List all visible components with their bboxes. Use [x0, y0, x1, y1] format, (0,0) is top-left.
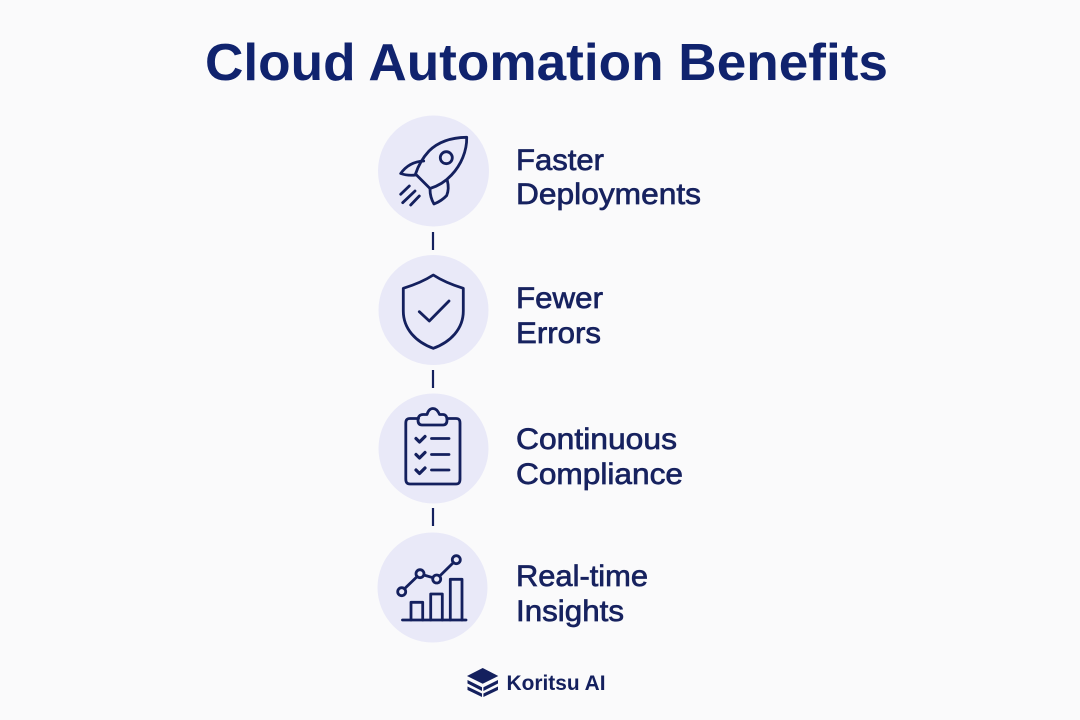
step: fewer errors — [378, 255, 603, 365]
connector: step 2 to 3 — [432, 370, 434, 388]
brand name: Koritsu AI — [506, 672, 606, 695]
label: faster deployments: Faster — [516, 144, 604, 177]
step: real-time insights — [378, 532, 648, 642]
brand logo — [467, 668, 606, 697]
label: real-time insights — [516, 560, 648, 628]
label: faster deployments: Deployments — [516, 178, 701, 211]
icon: layered cube — [467, 668, 498, 697]
icon circle: shield — [378, 255, 488, 365]
connector: step 3 to 4 — [432, 508, 434, 526]
label: real-time insights: Real-time — [516, 560, 648, 593]
connector: step 1 to 2 — [432, 232, 434, 250]
label: faster deployments — [516, 144, 701, 211]
label: real-time insights: Insights — [516, 595, 624, 628]
label: continuous compliance: Continuous — [516, 423, 677, 456]
icon circle: chart — [378, 532, 488, 642]
label: continuous compliance — [516, 423, 683, 491]
icon circle: clipboard — [378, 394, 488, 504]
title: Cloud Automation Benefits — [205, 34, 888, 92]
icon circle: rocket — [378, 116, 489, 226]
label: fewer errors: Fewer — [516, 282, 603, 315]
step: continuous compliance — [378, 394, 683, 504]
step: faster deployments — [378, 116, 701, 226]
label: fewer errors — [516, 282, 603, 350]
label: fewer errors: Errors — [516, 317, 601, 350]
label: continuous compliance: Compliance — [516, 458, 683, 491]
